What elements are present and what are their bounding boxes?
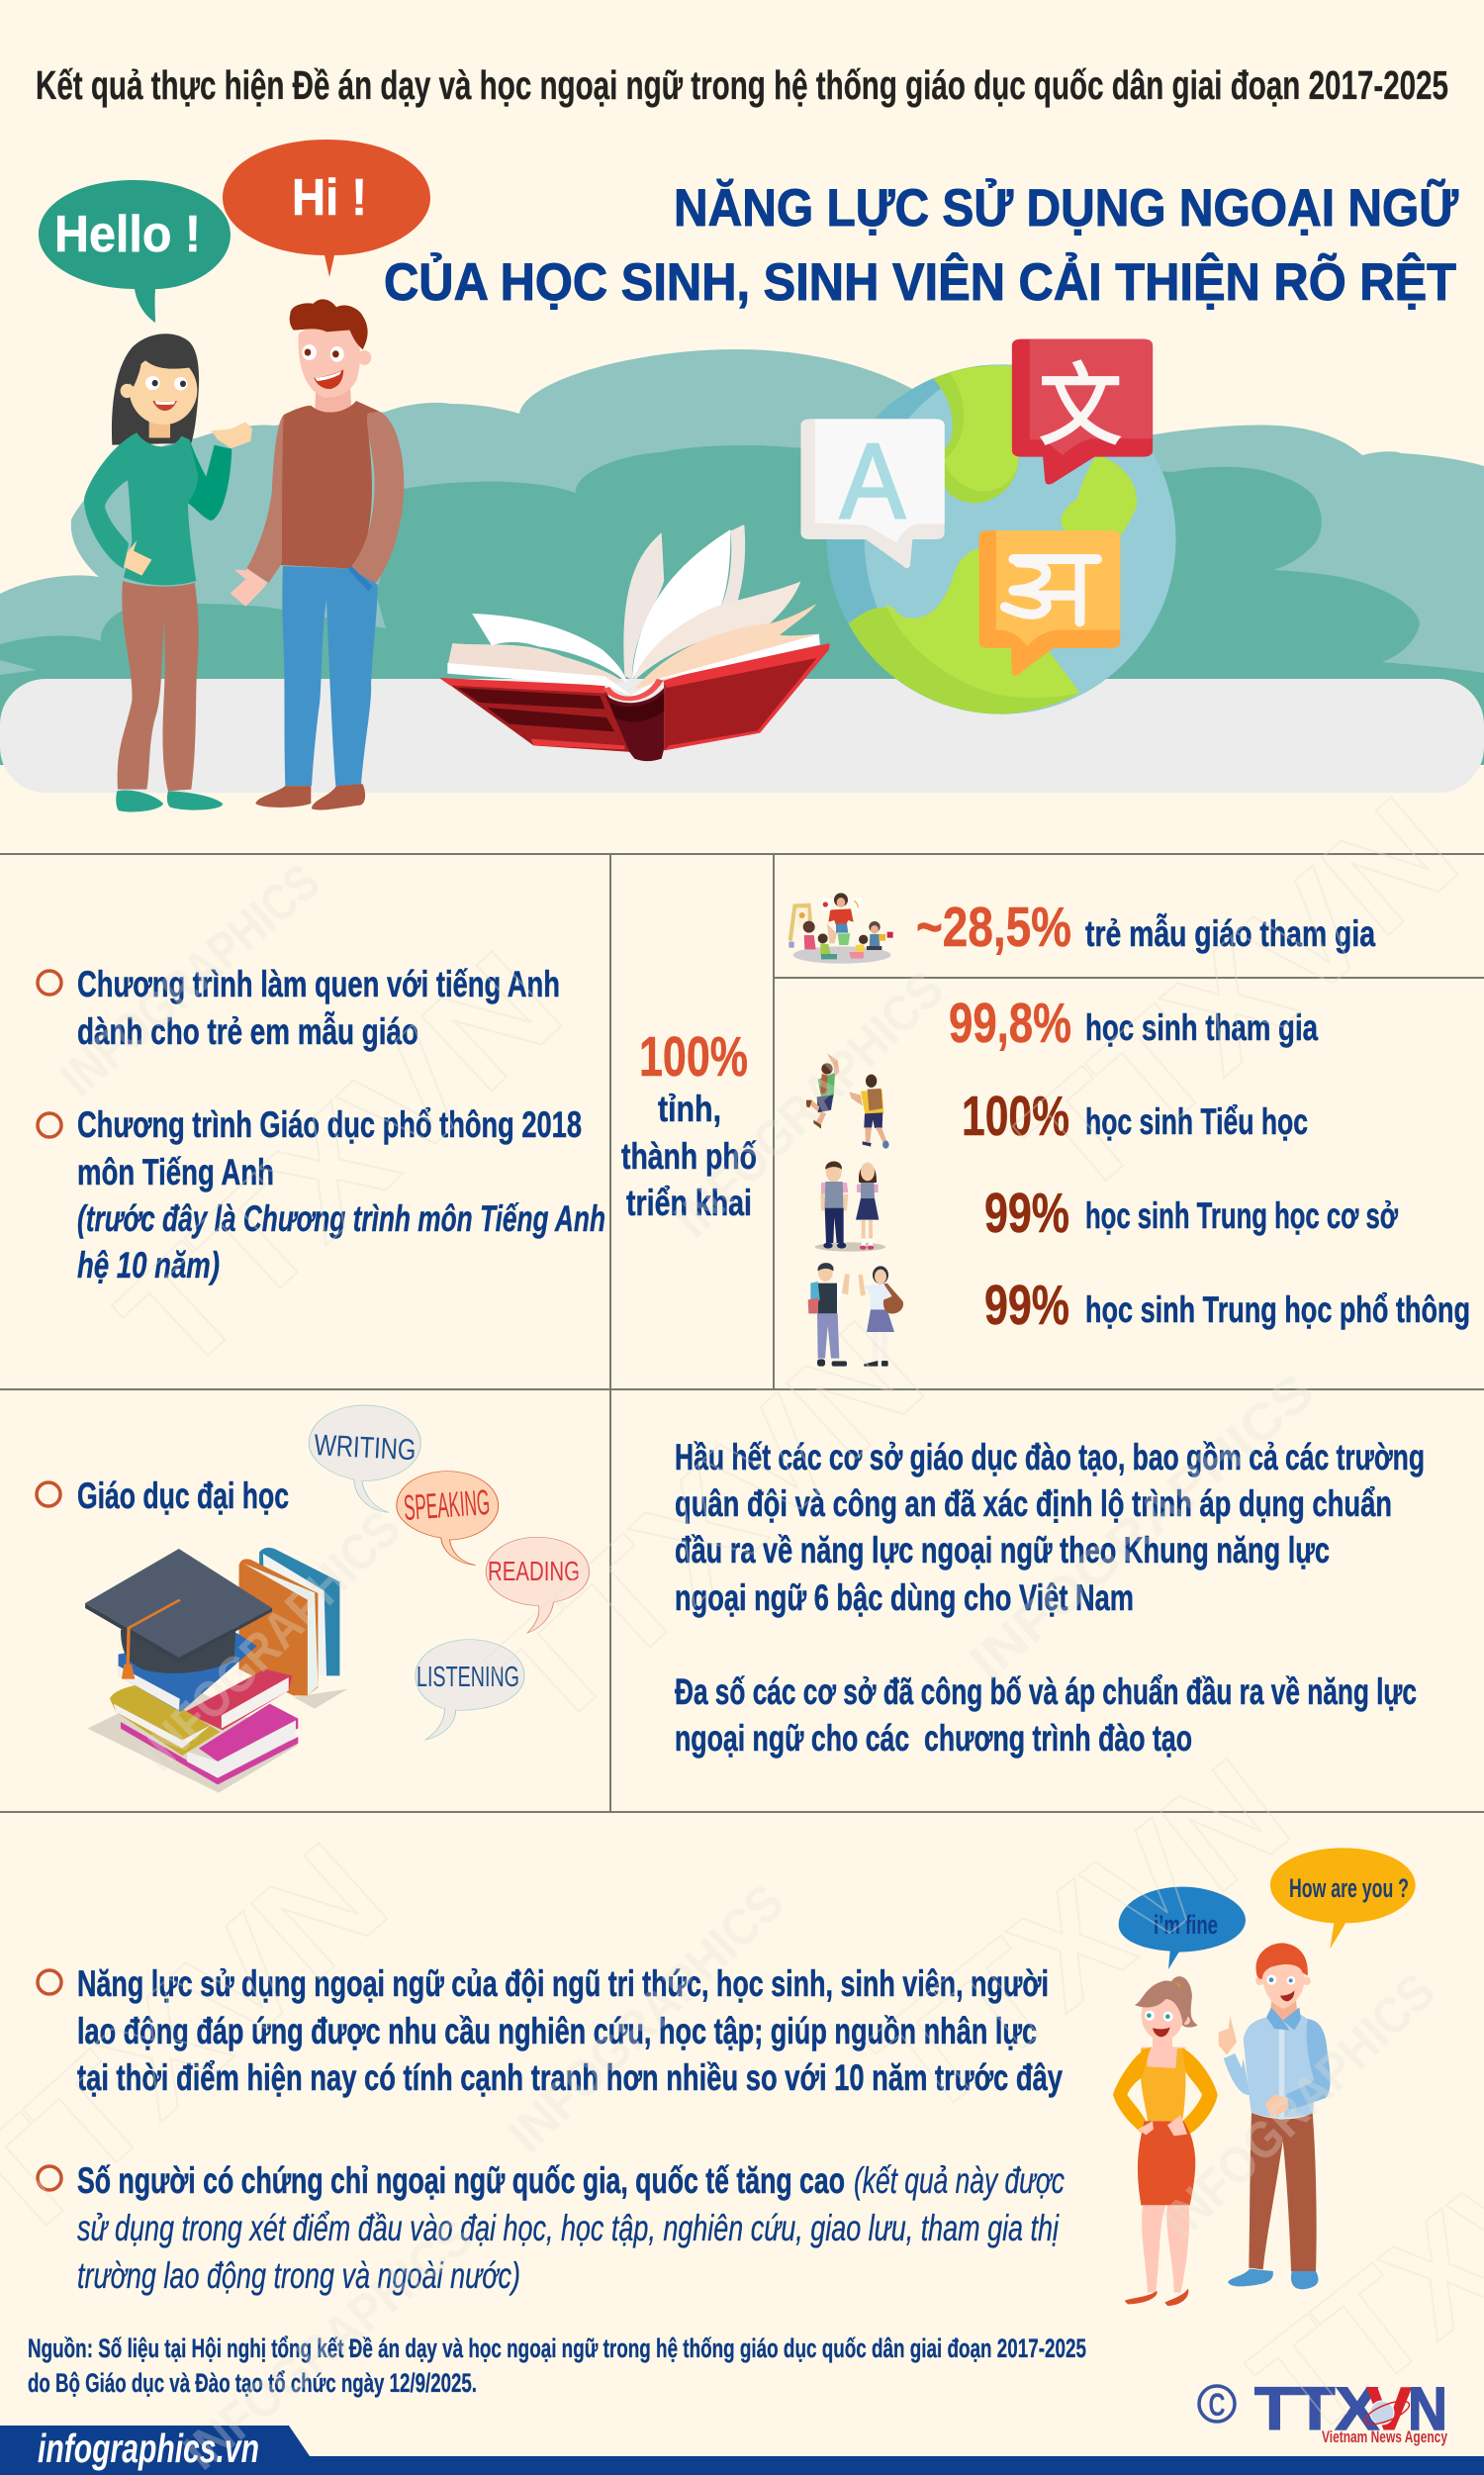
watermarks: INFOGRAPHICS — [50, 853, 330, 1107]
section grid lines — [0, 854, 1484, 1812]
bubble: SPEAKING: SPEAKING — [403, 1481, 491, 1528]
text block: 2018 general education programme: (trước đây là Chương trình môn Tiếng Anh — [77, 1198, 605, 1239]
speech bubble: Hi: Hi ! — [292, 169, 367, 227]
speech bubble: Hello — [39, 180, 231, 323]
text block: certificates: Số người có chứng chỉ ngoại ngữ quốc gia, quốc tế tăng cao — [77, 2160, 845, 2201]
icon: speech bubble with letter A — [800, 419, 945, 568]
bullet ring 2 — [38, 1113, 61, 1137]
stat row: preschool — [916, 896, 1375, 959]
watermarks: TTXVN — [844, 1727, 1317, 2147]
text block: workforce competitiveness: Năng lực sử dụng ngoại ngữ của đội ngũ tri thức, học sinh, sinh viên, người — [77, 1963, 1049, 2004]
footer band — [0, 2426, 1484, 2475]
panel: higher education — [37, 1475, 289, 1516]
stat row: upper secondary: 99% — [984, 1274, 1069, 1337]
bubble: LISTENING: LISTENING — [417, 1662, 519, 1693]
text block: certificates — [77, 2160, 1065, 2296]
bubble: I'm fine — [1119, 1887, 1246, 1969]
bullet ring — [38, 1970, 61, 1994]
watermarks: INFOGRAPHICS — [960, 1363, 1325, 1691]
bubble: SPEAKING — [397, 1472, 499, 1566]
watermarks: TTXVN — [461, 1289, 953, 1761]
panel: 100% provinces: 100% — [639, 1025, 748, 1089]
watermarks: INFOGRAPHICS — [664, 961, 955, 1249]
icon: speech bubble with letter A: A — [840, 421, 905, 540]
text block: higher-education output standards: ngoại ngữ cho các chương trình đào tạo — [675, 1718, 1192, 1759]
stat row: pupils participating: học sinh tham gia — [1085, 1007, 1318, 1048]
speech bubble: Hi — [223, 140, 430, 277]
icon: speech bubble with Chinese character: 文 — [1039, 333, 1122, 462]
stat row: primary: học sinh Tiểu học — [1085, 1101, 1308, 1142]
illustration: open red book — [439, 524, 830, 761]
bubble: WRITING — [309, 1405, 420, 1512]
text block: workforce competitiveness — [77, 1963, 1063, 2098]
bubble: READING — [486, 1537, 589, 1633]
watermarks: TTXVN — [88, 920, 591, 1404]
panel: 100% provinces: tỉnh, — [658, 1089, 721, 1129]
illustration: woman in green sweater — [84, 333, 252, 811]
bullet ring — [37, 1482, 60, 1506]
stat row: preschool: ~28,5% — [916, 896, 1071, 959]
logo: TTXVN Vietnam News Agency: C — [1209, 2387, 1225, 2423]
speech bubble: Hello: Hello ! — [54, 206, 201, 263]
stat row: lower secondary: 99% — [984, 1182, 1069, 1245]
text block: workforce competitiveness: tại thời điểm hiện nay có tính cạnh tranh hơn nhiều so với 10 năm trước đây — [77, 2057, 1063, 2098]
watermarks: INFOGRAPHICS — [498, 1873, 795, 2164]
logo: TTXVN Vietnam News Agency: TTX — [1254, 2375, 1379, 2442]
bubble: READING: READING — [488, 1556, 580, 1586]
text block: preschool programme: dành cho trẻ em mẫu giáo — [77, 1011, 418, 1052]
illustration: upper secondary pupils — [808, 1263, 903, 1367]
panel: overall results — [38, 1963, 1065, 2296]
text block: certificates: sử dụng trong xét điểm đầu vào đại học, học tập, nghiên cứu, giao lưu, tham gia thị — [77, 2208, 1060, 2248]
bubble: How are you: How are you ? — [1289, 1873, 1409, 1903]
stat row: upper secondary — [984, 1274, 1470, 1337]
text block: certificates: trường lao động trong và ngoài nước) — [77, 2255, 520, 2296]
illustration: primary pupils — [806, 1053, 889, 1149]
main title — [384, 178, 1458, 312]
footer site name: infographics.vn — [38, 2426, 259, 2471]
illustration: graduation cap on books — [85, 1548, 348, 1793]
illustration: man in brown sweater — [231, 299, 404, 809]
watermarks: INFOGRAPHICS — [173, 2208, 483, 2475]
illustration: man in blue shirt — [1219, 1943, 1331, 2289]
bullet ring 2 — [38, 2166, 61, 2190]
stat row: primary — [962, 1085, 1308, 1148]
bubble: LISTENING — [416, 1640, 524, 1740]
bullet ring — [38, 971, 61, 995]
source note: do Bộ Giáo dục và Đào tạo tổ chức ngày 12/9/2025. — [28, 2368, 477, 2398]
logo: TTXVN Vietnam News Agency: V — [1366, 2375, 1412, 2442]
panel: English programmes — [38, 964, 605, 1285]
stat row: preschool: trẻ mẫu giáo tham gia — [1085, 913, 1375, 954]
source note — [28, 2333, 1086, 2398]
icon: speech bubble with Chinese character — [1012, 333, 1153, 484]
watermarks: INFOGRAPHICS — [1152, 1962, 1446, 2250]
panel: 100% provinces: thành phố — [621, 1136, 757, 1177]
logo: TTXVN Vietnam News Agency — [1199, 2375, 1447, 2446]
watermarks — [0, 766, 1484, 2475]
text block: 2018 general education programme: môn Tiếng Anh — [77, 1152, 274, 1192]
illustration: kindergarten teacher and children — [788, 893, 893, 964]
panel: 100% provinces: triển khai — [626, 1183, 752, 1223]
stat row: pupils participating: 99,8% — [949, 992, 1071, 1055]
illustration: woman in orange top — [1113, 1976, 1218, 2306]
text block: certificates: (kết quả này được — [854, 2160, 1065, 2201]
logo: TTXVN Vietnam News Agency: N — [1408, 2375, 1447, 2442]
text block: workforce competitiveness: lao động đáp ứng được nhu cầu nghiên cứu, học tập; giúp nguồn nhân lực — [77, 2011, 1037, 2051]
text block: higher-education output standards — [675, 1437, 1425, 1759]
watermarks: TTXVN — [990, 766, 1484, 1228]
stat row: lower secondary — [984, 1182, 1398, 1245]
watermarks: INFOGRAPHICS — [129, 1500, 412, 1782]
stat row: primary: 100% — [962, 1085, 1069, 1148]
bubble: I'm fine: i’m fine — [1154, 1910, 1218, 1940]
text block: 2018 general education programme — [77, 1104, 605, 1285]
icon: speech bubble with Devanagari letter — [979, 530, 1120, 676]
stat row: pupils participating — [949, 992, 1318, 1055]
illustration: globe with land — [826, 364, 1175, 714]
bubble: How are you — [1270, 1848, 1416, 1949]
hero illustration backdrop: clouds and pill — [0, 349, 1484, 793]
text block: higher-education output standards: ngoại ngữ 6 bậc dùng cho Việt Nam — [675, 1577, 1134, 1618]
heading: higher education: Giáo dục đại học — [77, 1475, 289, 1516]
text block: preschool programme: Chương trình làm quen với tiếng Anh — [77, 964, 560, 1004]
illustration: lower secondary pupils — [815, 1161, 885, 1252]
text block: 2018 general education programme: hệ 10 năm) — [77, 1245, 220, 1285]
panel: 100% provinces — [621, 1025, 757, 1223]
text block: preschool programme — [77, 964, 560, 1052]
bubble: WRITING: WRITING — [314, 1429, 417, 1467]
text block: 2018 general education programme: Chương trình Giáo dục phổ thông 2018 — [77, 1104, 582, 1145]
